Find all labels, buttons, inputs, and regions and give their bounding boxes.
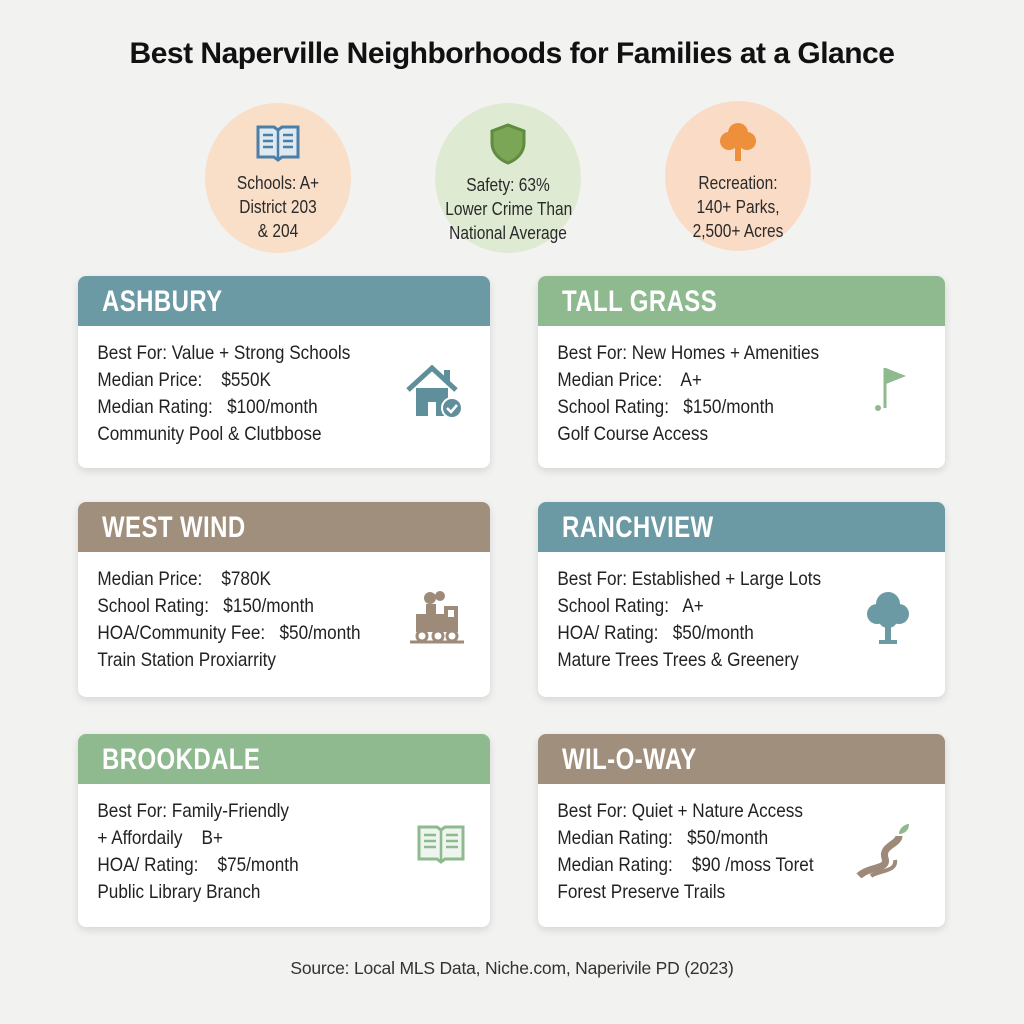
- card: west wind: HOA/Community Fee: $50/month: [97, 622, 361, 644]
- card: west wind: Median Price: $780K: [97, 568, 271, 590]
- card: ranchview: Mature Trees Trees & Greenery: [557, 649, 799, 671]
- circle: recreation: 2,500+ Acres: [693, 221, 783, 241]
- card: ranchview: Best For: Established + Large Lots: [557, 568, 821, 590]
- icon: train: [410, 591, 464, 644]
- card: ashbury: Community Pool & Clutbbose: [97, 423, 321, 445]
- card: brookdale: Best For: Family-Friendly: [97, 800, 289, 822]
- card: wil-o-way: Forest Preserve Trails: [557, 881, 725, 903]
- circle: safety: Lower Crime Than: [445, 199, 572, 219]
- icon: golf flag: [875, 368, 906, 411]
- card: west wind: [78, 502, 490, 697]
- card: tall grass: Golf Course Access: [557, 423, 708, 445]
- card: west wind: WEST WIND: [102, 511, 246, 544]
- card: brookdale: HOA/ Rating: $75/month: [97, 854, 299, 876]
- icon: tree: [867, 592, 909, 644]
- circle: safety: [435, 103, 581, 253]
- card: tall grass: Median Price: A+: [557, 369, 702, 391]
- title: Best Naperville Neighborhoods for Families at a Glance: [130, 37, 894, 70]
- icon: tree: [720, 123, 756, 161]
- card: brookdale: + Affordaily B+: [97, 827, 223, 849]
- card: ashbury: Median Price: $550K: [97, 369, 271, 391]
- card: wil-o-way: WIL-O-WAY: [562, 743, 697, 776]
- card: ranchview: [538, 502, 945, 697]
- card: brookdale: BROOKDALE: [102, 743, 260, 776]
- card: wil-o-way: Best For: Quiet + Nature Access: [557, 800, 803, 822]
- card: ashbury: Median Rating: $100/month: [97, 396, 318, 418]
- icon: trail: [856, 824, 909, 878]
- card: tall grass: School Rating: $150/month: [557, 396, 774, 418]
- card: west wind: Train Station Proxiarrity: [97, 649, 276, 671]
- circle: safety: National Average: [449, 223, 567, 243]
- icon: shield: [490, 123, 526, 165]
- circle: recreation: Recreation:: [698, 173, 778, 193]
- circle: schools: & 204: [258, 221, 298, 241]
- card: ranchview: HOA/ Rating: $50/month: [557, 622, 754, 644]
- circle: schools: Schools: A+: [237, 173, 319, 193]
- icon: book: [418, 826, 464, 864]
- card: brookdale: [78, 734, 490, 927]
- card: tall grass: [538, 276, 945, 468]
- card: ranchview: School Rating: A+: [557, 595, 704, 617]
- circle: schools: [205, 103, 351, 253]
- circle: schools: District 203: [239, 197, 317, 217]
- circle: recreation: [665, 101, 811, 251]
- card: west wind: School Rating: $150/month: [97, 595, 314, 617]
- circle: recreation: 140+ Parks,: [696, 197, 780, 217]
- card: wil-o-way: Median Rating: $50/month: [557, 827, 768, 849]
- card: ranchview: RANCHVIEW: [562, 511, 714, 544]
- card: wil-o-way: [538, 734, 945, 927]
- card: tall grass: TALL GRASS: [562, 285, 717, 318]
- card: wil-o-way: Median Rating: $90 /moss Toret: [557, 854, 814, 876]
- icon: book: [256, 126, 300, 162]
- source text: Source: Local MLS Data, Niche.com, Naperivile PD (2023): [290, 958, 734, 978]
- circle: safety: Safety: 63%: [466, 175, 550, 195]
- card: ashbury: [78, 276, 490, 468]
- card: brookdale: Public Library Branch: [97, 881, 260, 903]
- card: ashbury: ASHBURY: [102, 285, 223, 318]
- card: ashbury: Best For: Value + Strong Schools: [97, 342, 350, 364]
- icon: house: [406, 364, 461, 417]
- card: tall grass: Best For: New Homes + Amenities: [557, 342, 819, 364]
